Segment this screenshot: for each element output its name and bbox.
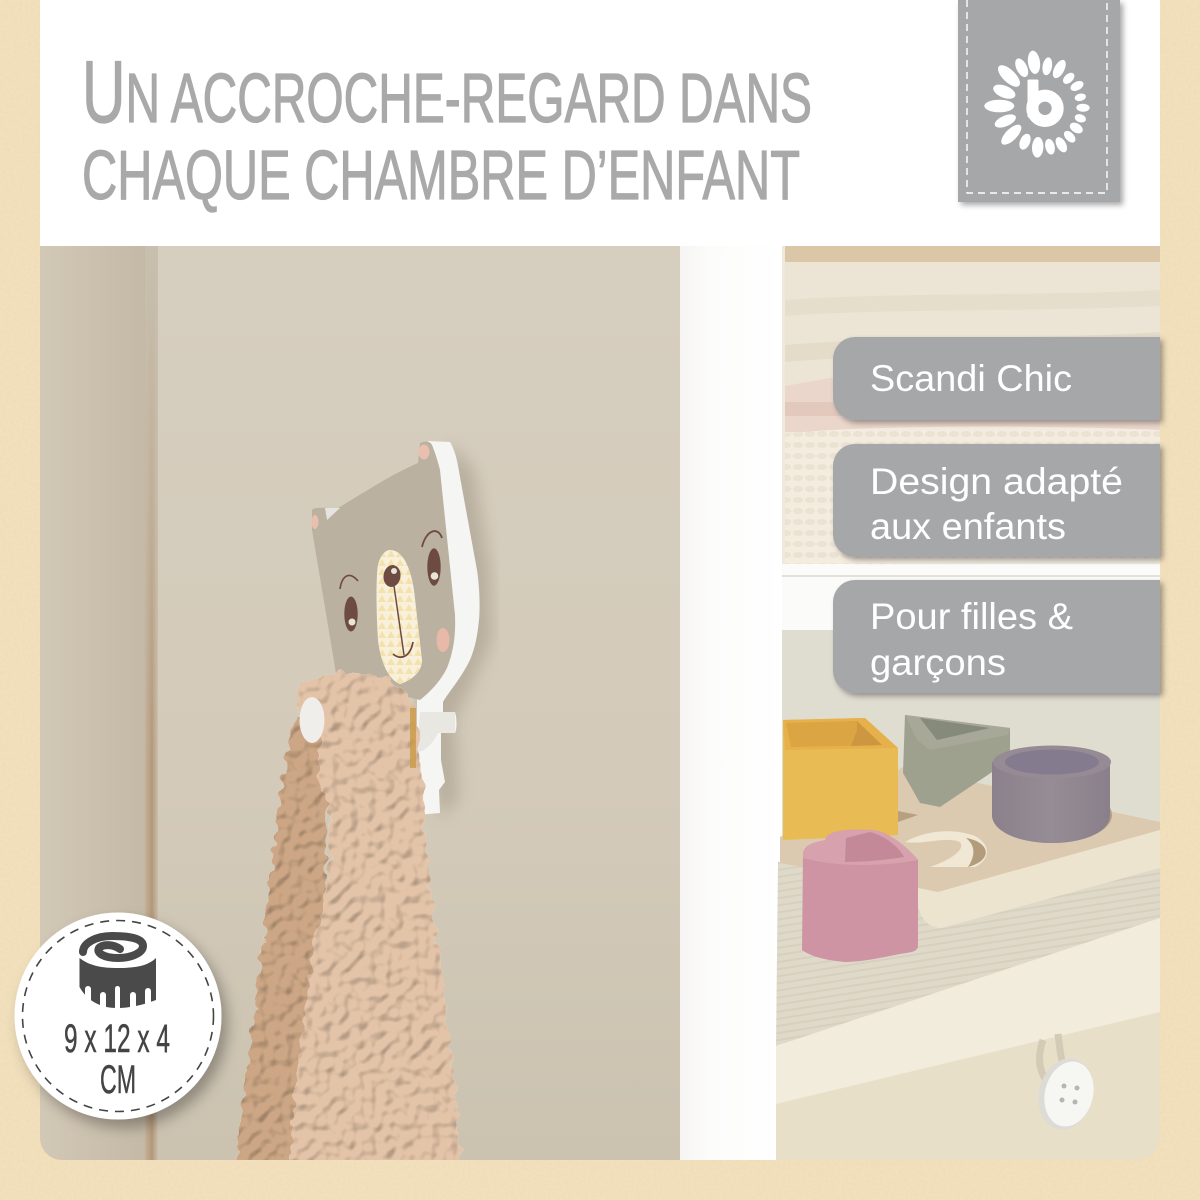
white furniture column bbox=[680, 246, 784, 1160]
bear ear notch bbox=[325, 508, 340, 520]
yellow hook stitch detail bbox=[410, 708, 416, 768]
pill: Pour filles & garçons: Pour filles & bbox=[870, 596, 1073, 637]
bear hook bbox=[312, 441, 480, 815]
pill: Pour filles & garçons: garçons bbox=[870, 642, 1006, 683]
photo: nursery scene bbox=[40, 246, 1160, 1170]
brand tag with logo bbox=[958, 0, 1120, 202]
bear left eye bbox=[340, 575, 358, 632]
wall left section bbox=[40, 246, 146, 1160]
toy: yellow cube bbox=[783, 718, 898, 840]
toy: purple cylinder bbox=[992, 746, 1112, 843]
pill: Scandi Chic: Scandi Chic bbox=[870, 358, 1072, 399]
icon: measuring tape bbox=[80, 936, 156, 1012]
button with loop bbox=[1036, 1034, 1094, 1130]
wall main panel bbox=[158, 246, 682, 1160]
shelf front edge bbox=[776, 918, 1160, 1104]
pill: Design adapté aux enfants: aux enfants bbox=[870, 506, 1066, 547]
title: UN ACCROCHE-REGARD DANS bbox=[82, 42, 812, 141]
icon: flower logo bbox=[984, 50, 1090, 158]
bear muzzle bbox=[376, 550, 422, 684]
size badge bbox=[14, 912, 222, 1120]
pill: Pour filles & garçons bbox=[833, 580, 1160, 693]
cast shadow of hook bbox=[420, 442, 492, 818]
toy: pink heart bbox=[802, 830, 918, 962]
pill: Scandi Chic bbox=[833, 337, 1160, 420]
hook white side profile bbox=[417, 441, 480, 815]
wooden shape-sorter board bbox=[780, 767, 1160, 928]
storage box bbox=[776, 1012, 1160, 1160]
towel: front strand bbox=[290, 673, 462, 1170]
title: CHAQUE CHAMBRE D’ENFANT bbox=[82, 136, 800, 214]
lower shelf back wall bbox=[782, 630, 1160, 836]
dimensions text: 9 x 12 x 4 bbox=[64, 1017, 170, 1061]
bear ears bbox=[418, 444, 430, 460]
bear face bbox=[312, 442, 455, 700]
bear cheek bbox=[436, 628, 450, 652]
pill: Design adapté aux enfants bbox=[833, 444, 1160, 557]
dimensions text bbox=[64, 1017, 170, 1102]
upper shelf textiles bbox=[782, 246, 1160, 632]
toy: sage triangle bbox=[903, 715, 1010, 807]
door edge bbox=[145, 316, 158, 1160]
bear right eye bbox=[422, 531, 442, 586]
towel: back strand bbox=[236, 716, 328, 1170]
feature pills bbox=[833, 337, 1160, 693]
title bbox=[82, 42, 812, 214]
peg of hook bbox=[417, 712, 455, 752]
shelf surface with ribbed fabric bbox=[776, 862, 1160, 1046]
white header band bbox=[40, 0, 1160, 246]
wall peg bbox=[300, 697, 324, 743]
dimensions text: CM bbox=[100, 1058, 136, 1102]
pill: Design adapté aux enfants: Design adapté bbox=[870, 461, 1123, 502]
bear nose and mouth bbox=[382, 564, 413, 657]
